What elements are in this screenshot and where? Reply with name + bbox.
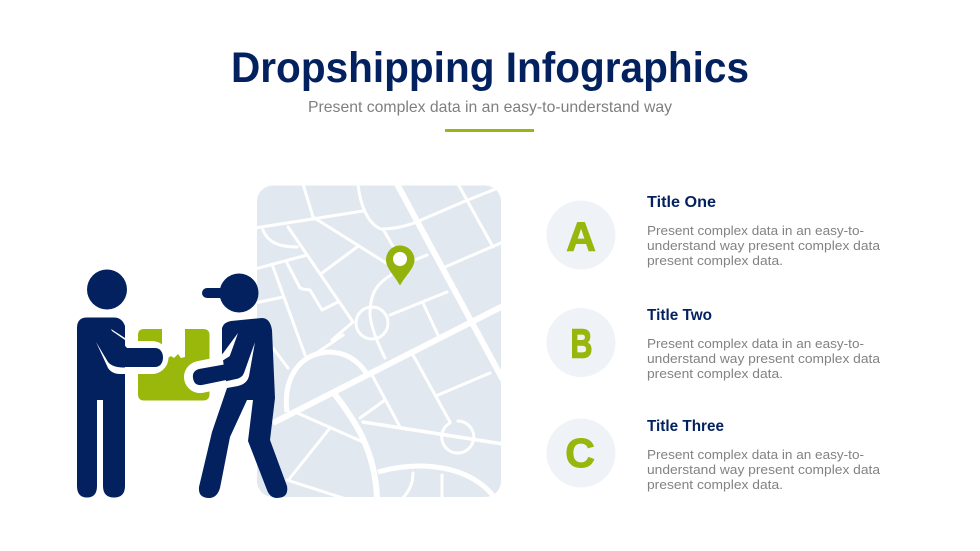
icon: map pin: [386, 246, 414, 286]
title: Dropshipping Infographics: [231, 44, 749, 92]
item B: [546, 307, 881, 381]
badge C: [546, 418, 616, 488]
body text A: understand way present complex data: [647, 238, 881, 253]
letter B: B: [571, 320, 592, 367]
badge B: [546, 308, 616, 377]
figure: customer: [77, 270, 163, 498]
subtitle: Present complex data in an easy-to-understand way: [308, 99, 672, 116]
body text C: present complex data.: [647, 477, 783, 492]
letter A: A: [566, 214, 596, 260]
box cut-outs around hands: [128, 358, 235, 377]
body text C: Present complex data in an easy-to-: [647, 447, 864, 462]
heading: title one: Title One: [647, 194, 716, 211]
item C: [546, 418, 881, 492]
body text B: [647, 336, 881, 381]
badge A: [546, 200, 616, 270]
body text A: [647, 223, 881, 268]
heading: title three: Title Three: [647, 418, 724, 435]
body text B: present complex data.: [647, 366, 783, 381]
letter C: C: [565, 430, 595, 476]
figure: courier: [193, 274, 287, 498]
map panel: [255, 184, 503, 498]
item A: [546, 194, 881, 270]
body text B: understand way present complex data: [647, 351, 881, 366]
body text C: understand way present complex data: [647, 462, 881, 477]
body text A: present complex data.: [647, 253, 783, 268]
heading: title two: Title Two: [647, 307, 712, 324]
icon: parcel box: [138, 329, 210, 400]
body text B: Present complex data in an easy-to-: [647, 336, 864, 351]
title underline: [445, 129, 534, 132]
body text A: Present complex data in an easy-to-: [647, 223, 864, 238]
body text C: [647, 447, 881, 492]
